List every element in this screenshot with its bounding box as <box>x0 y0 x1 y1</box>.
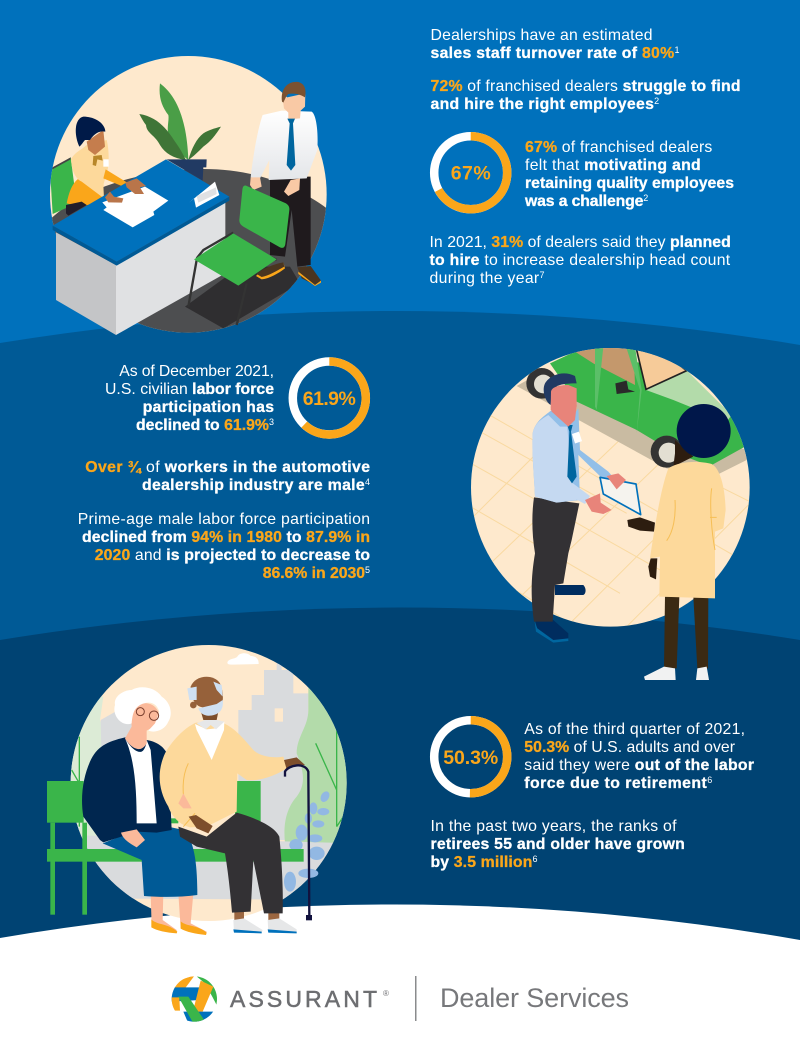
text: planned to hire <box>430 234 731 287</box>
text: motivating and retaining: retaining quality employees <box>525 175 734 192</box>
donut chart: 61.9%: 61.9% <box>303 388 356 410</box>
text: motivating and retaining: 2 <box>643 193 648 203</box>
text: retirees growth: 6 <box>532 854 538 864</box>
elderly woman <box>82 687 207 935</box>
text: out of labor force <box>524 721 754 792</box>
elderly man with cane <box>160 677 312 933</box>
text: sales staff turnover <box>430 27 680 62</box>
illustration: showroom handshake scene <box>471 348 750 680</box>
text: prime-age male participation: declined from 94% in 1980 to 87.9% in <box>82 529 370 546</box>
background: top blue band <box>0 0 800 400</box>
illustration: retired couple on bench <box>47 640 353 935</box>
text: sales staff turnover: Dealerships have an estimated <box>430 27 652 44</box>
cloud <box>227 653 259 665</box>
donut chart: 50.3%: 50.3% <box>443 747 498 769</box>
salesman <box>532 373 641 643</box>
scene circle with floor <box>40 53 340 337</box>
plant <box>139 83 221 181</box>
text: prime-age male participation: Prime-age male labor force participation <box>78 511 370 528</box>
text: labor force participation: U.S. civilian labor force <box>105 381 274 398</box>
text: male workers: 4 <box>365 477 370 487</box>
text: planned to hire: 7 <box>539 270 544 280</box>
text: hiring struggle: and hire the right employees <box>430 96 654 113</box>
green chair <box>188 186 289 325</box>
decorative blue plant <box>284 790 331 892</box>
logo: Assurant wordmark: ® <box>383 989 389 998</box>
text: male workers: Over ¾ of workers in the automotive <box>85 459 370 476</box>
donut chart: 61.9% <box>293 362 366 434</box>
text: out of labor force: force due to retirement <box>524 775 708 792</box>
text: retirees growth: In the past two years, the ranks of <box>430 818 677 835</box>
showroom floor and car <box>471 348 750 627</box>
text: motivating and retaining <box>524 139 734 210</box>
illustration: office desk scene <box>40 53 340 337</box>
background: white footer curve <box>0 904 800 1060</box>
text: labor force participation: participation has <box>143 399 274 416</box>
text: planned to hire: to hire to increase dealership head count <box>430 252 731 269</box>
text: prime-age male participation: 5 <box>365 565 370 575</box>
text: male workers: dealership industry are male <box>142 477 365 494</box>
donut chart: 50.3% <box>434 720 507 793</box>
text: out of labor force: 50.3% of U.S. adults and over <box>524 739 735 756</box>
logo: Assurant wordmark: ASSURANT <box>230 986 377 1012</box>
park background circle <box>67 640 353 927</box>
text: out of labor force: As of the third quarter of 2021, <box>524 721 745 738</box>
text: labor force participation <box>105 363 274 434</box>
logo: Dealer Services: Dealer Services <box>440 983 629 1013</box>
logo: Assurant mark <box>172 976 217 1022</box>
donut chart: 67% <box>434 136 507 209</box>
text: motivating and retaining: was a challenge <box>524 193 644 210</box>
text: retirees growth <box>430 818 685 871</box>
woman at desk <box>66 117 128 216</box>
text: labor force participation: 3 <box>269 417 274 427</box>
text: hiring struggle <box>430 78 740 113</box>
text: labor force participation: As of December 2021, <box>119 363 274 380</box>
text: male workers <box>85 459 370 494</box>
text: hiring struggle: 72% of franchised dealers struggle to find <box>430 78 740 95</box>
text: prime-age male participation <box>78 511 370 582</box>
woman's hands on desk <box>105 178 146 203</box>
background: dark navy band <box>0 608 800 1000</box>
woman customer <box>627 404 731 680</box>
text: labor force participation: declined to 61.9% <box>136 417 269 434</box>
text: planned to hire: In 2021, 31% of dealers said they planned <box>430 234 731 251</box>
text: motivating and retaining: felt that motivating and <box>525 157 701 174</box>
green bench <box>47 781 304 915</box>
text: prime-age male participation: 86.6% in 2030 <box>263 565 365 582</box>
text: sales staff turnover: 1 <box>674 45 680 55</box>
background: middle blue band <box>0 311 800 700</box>
text: prime-age male participation: 2020 and is projected to decrease to <box>95 547 370 564</box>
text: retirees growth: by 3.5 million <box>430 854 532 871</box>
desk <box>53 159 229 335</box>
logo divider <box>415 976 416 1021</box>
man standing <box>250 82 321 286</box>
text: out of labor force: said they were out of the labor <box>524 757 754 774</box>
text: motivating and retaining: 67% of franchised dealers <box>525 139 712 156</box>
text: hiring struggle: 2 <box>654 96 659 106</box>
donut chart: 67%: 67% <box>451 162 491 184</box>
text: planned to hire: during the year <box>430 270 539 287</box>
text: retirees growth: retirees 55 and older have grown <box>430 836 685 853</box>
text: sales staff turnover: sales staff turnover rate of 80% <box>430 45 674 62</box>
text: out of labor force: 6 <box>707 775 712 785</box>
